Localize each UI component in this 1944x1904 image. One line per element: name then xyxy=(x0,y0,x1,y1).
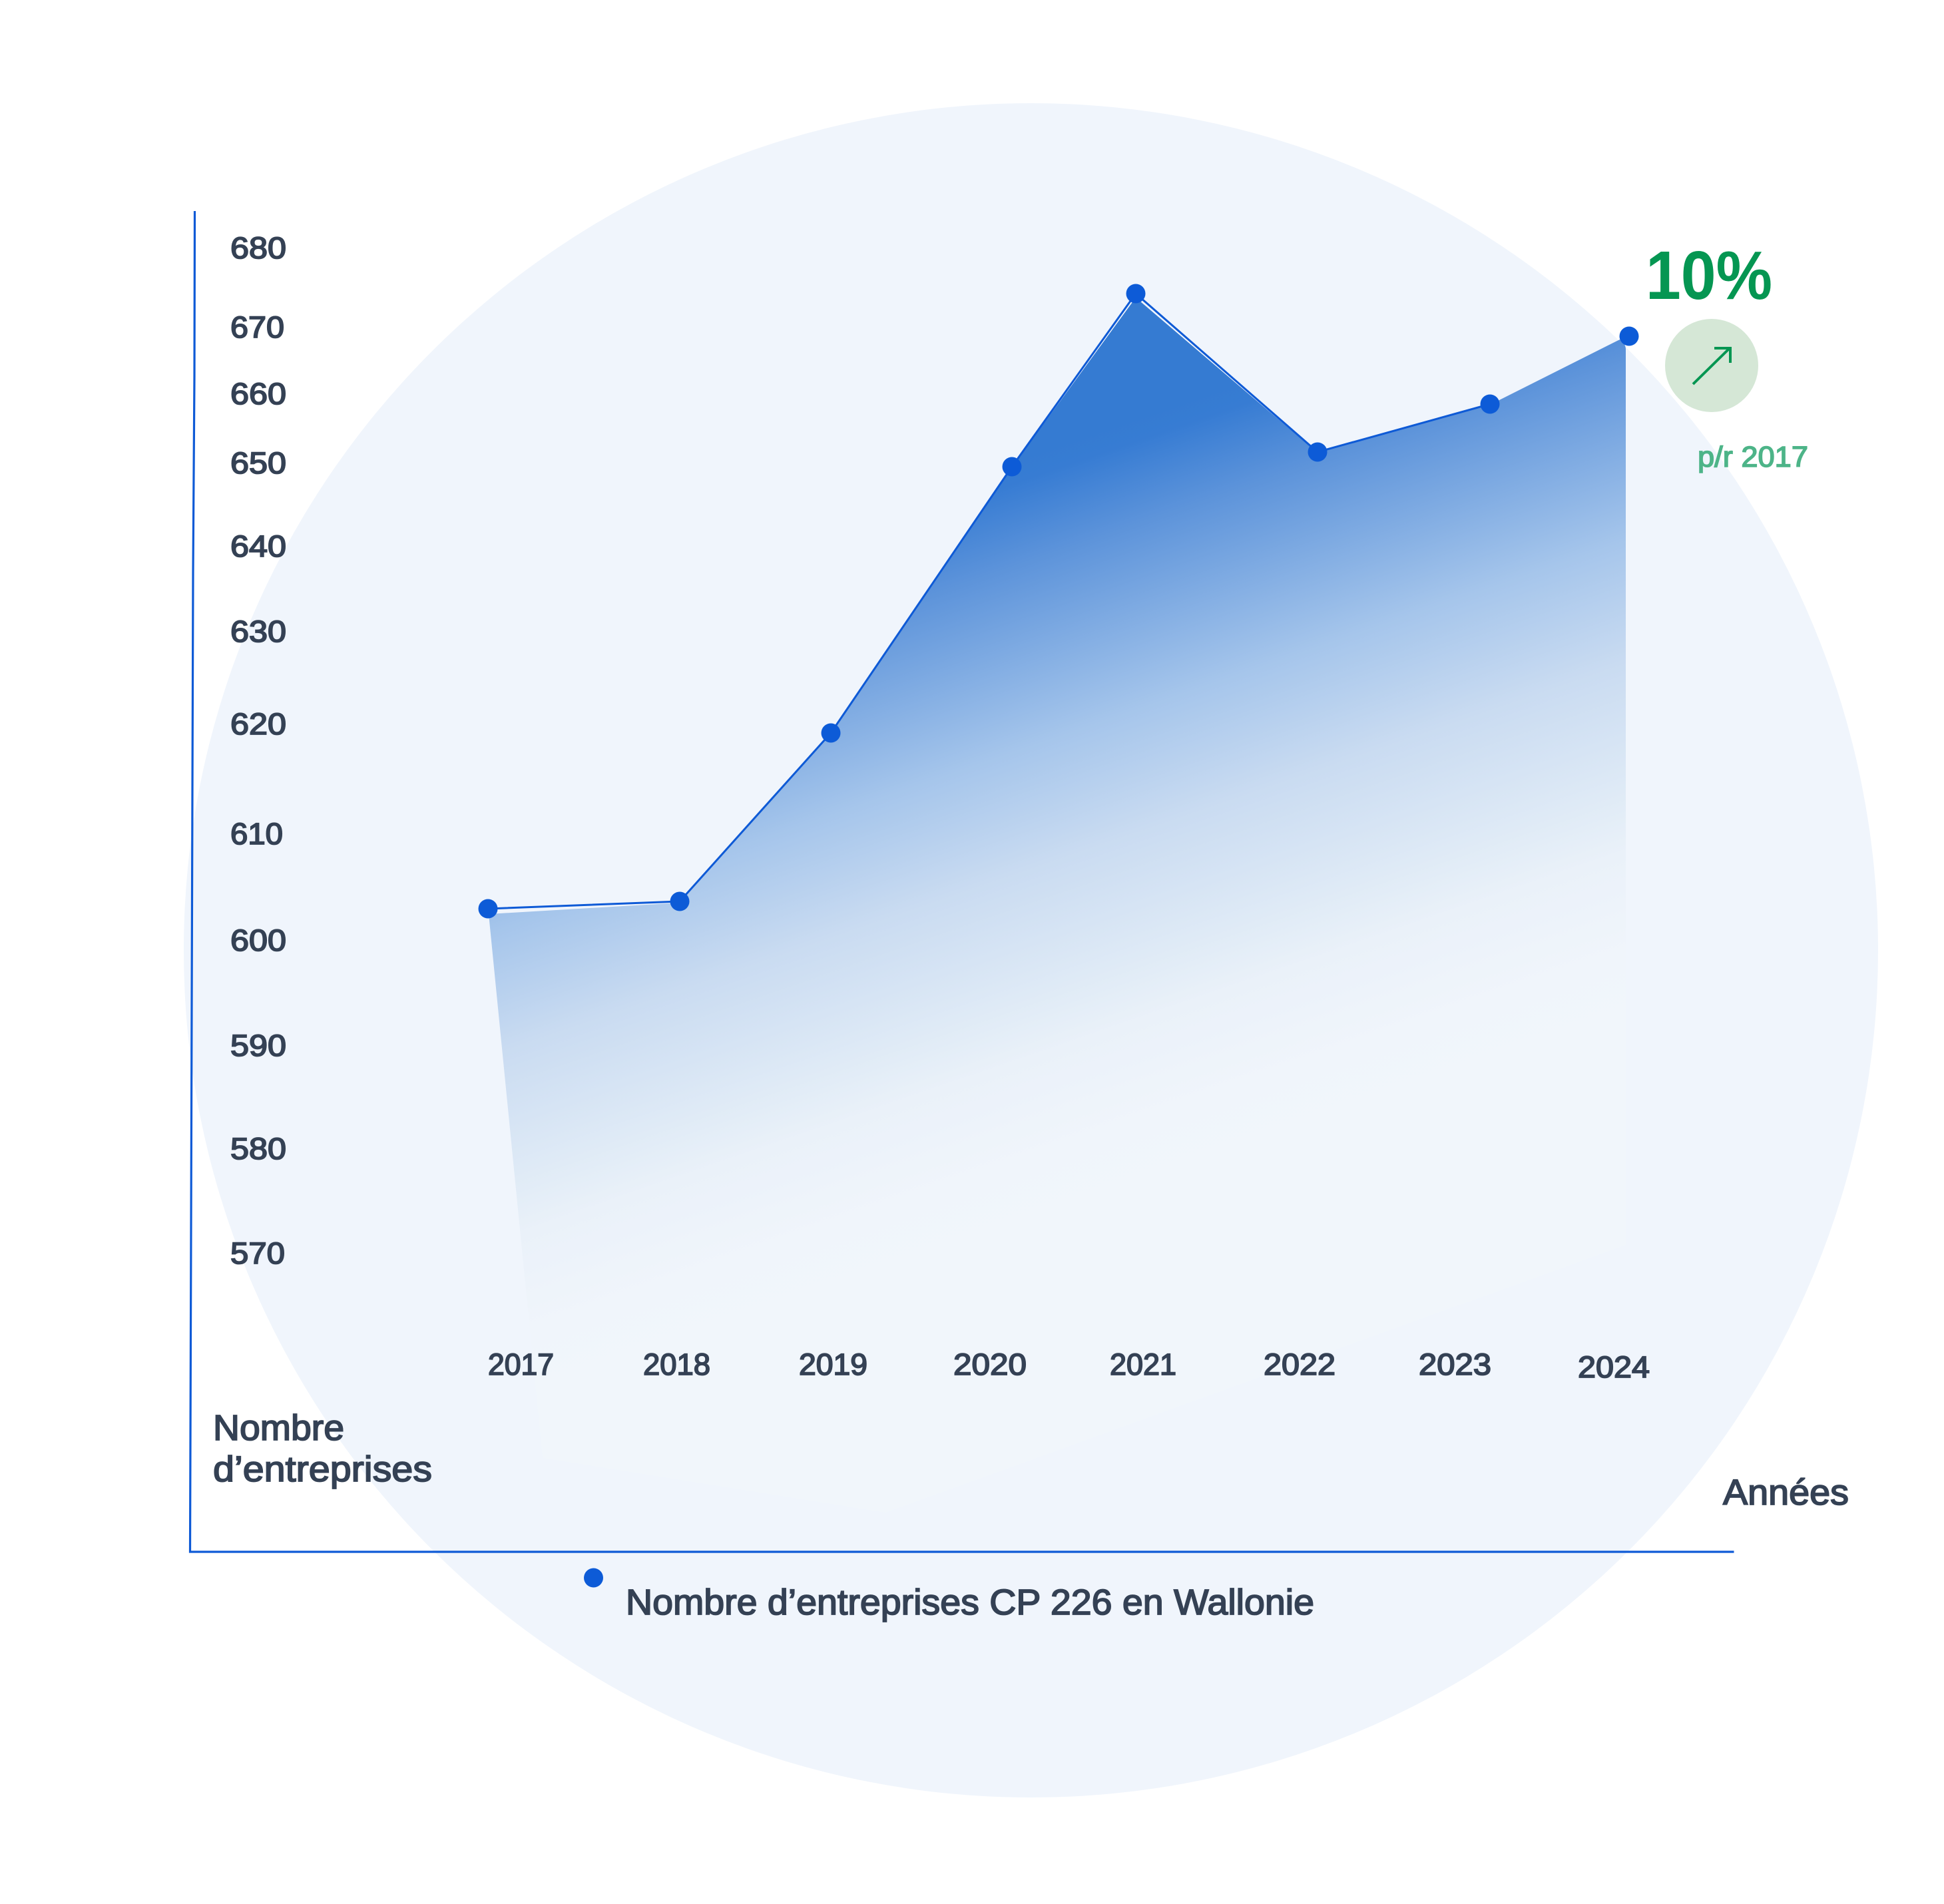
y axis labels: 650 xyxy=(230,446,286,480)
legend xyxy=(584,1568,1314,1622)
icon: upward arrow in circle xyxy=(1665,319,1758,412)
x axis labels: 2021 xyxy=(1110,1347,1176,1381)
y axis labels xyxy=(230,231,286,1270)
y axis title: Nombre xyxy=(213,1408,344,1448)
area chart fill xyxy=(489,298,1626,1513)
x axis labels: 2022 xyxy=(1264,1347,1336,1381)
legend label: Nombre d’entreprises CP 226 en Wallonie xyxy=(626,1582,1314,1622)
chart axes xyxy=(190,211,1734,1552)
y axis labels: 680 xyxy=(230,231,286,265)
legend marker xyxy=(584,1568,603,1587)
y axis labels: 660 xyxy=(230,377,286,411)
comparison note: p/r 2017 xyxy=(1698,441,1808,473)
y axis labels: 580 xyxy=(230,1132,286,1166)
background circle xyxy=(184,103,1878,1797)
y axis labels: 640 xyxy=(230,529,286,563)
y axis labels: 590 xyxy=(230,1029,286,1063)
y axis labels: 610 xyxy=(230,817,283,851)
line chart series xyxy=(488,294,1490,909)
x axis labels: 2019 xyxy=(799,1347,867,1381)
y axis labels: 600 xyxy=(230,923,286,957)
y axis labels: 630 xyxy=(230,614,286,648)
x axis labels: 2020 xyxy=(953,1347,1027,1381)
growth percentage: 10% xyxy=(1646,237,1772,314)
x axis labels: 2018 xyxy=(643,1347,710,1381)
data points xyxy=(478,284,1639,919)
y axis labels: 620 xyxy=(230,707,286,741)
x axis title: Années xyxy=(1723,1473,1849,1513)
x axis labels: 2023 xyxy=(1419,1347,1491,1381)
y axis labels: 670 xyxy=(230,310,284,344)
x axis labels: 2024 xyxy=(1578,1350,1650,1384)
y axis title: d’entreprises xyxy=(213,1449,432,1489)
x axis labels xyxy=(488,1347,1650,1384)
y axis labels: 570 xyxy=(230,1236,285,1270)
x axis labels: 2017 xyxy=(488,1347,554,1381)
y axis title xyxy=(213,1408,432,1489)
growth callout xyxy=(1646,237,1808,473)
